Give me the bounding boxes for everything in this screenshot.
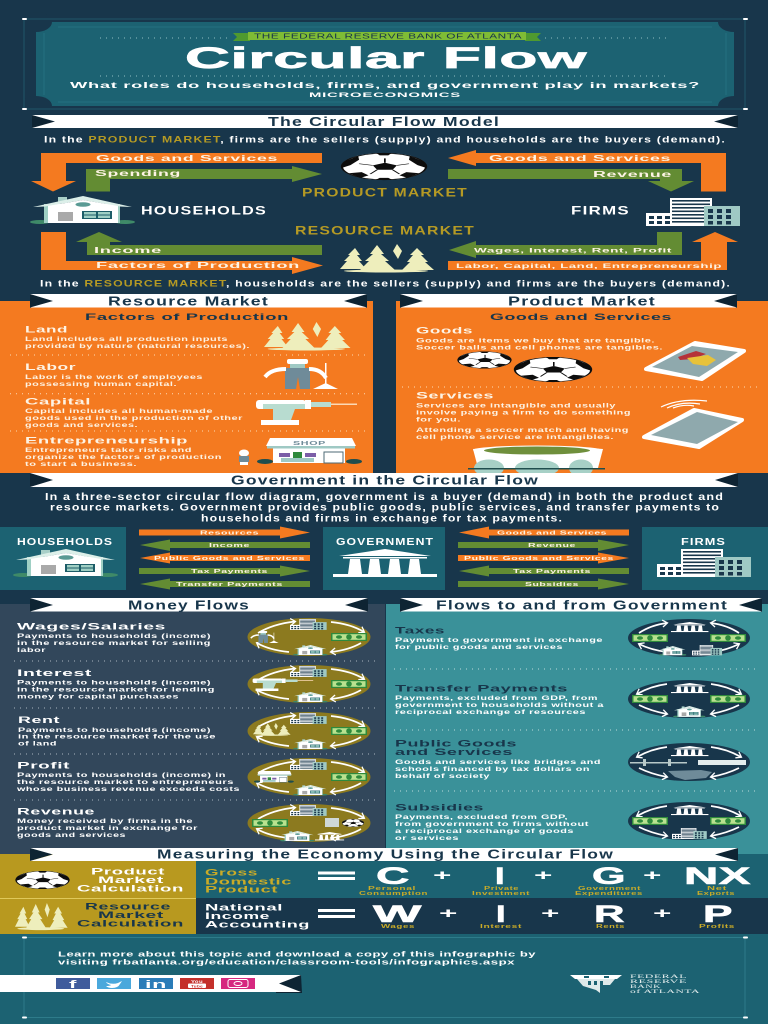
equation: GDP: C	[376, 863, 410, 890]
equation: GDP: Net	[707, 886, 727, 892]
item: revenue	[17, 806, 199, 839]
icon: soccer ball	[341, 153, 427, 180]
icon: firms	[646, 198, 740, 226]
icon: shop	[257, 438, 362, 464]
icon: youtube: You	[191, 979, 203, 984]
item: rent: Payments to households (income)	[18, 728, 211, 734]
equation: GDP	[318, 863, 751, 897]
icon: facebook: f	[69, 979, 77, 991]
item: services: for you.	[416, 418, 461, 424]
item: goods	[416, 326, 663, 352]
item: services	[416, 390, 631, 441]
item: goods: Goods	[416, 326, 473, 336]
heading: measuring the economy	[30, 848, 738, 862]
heading: product market	[400, 294, 737, 308]
heading: resource market: Resource Market	[108, 294, 269, 308]
equation: national income: +	[541, 905, 560, 922]
arrow: goods and services left: Goods and Services	[96, 154, 279, 163]
item: taxes: Taxes	[395, 626, 445, 636]
arrow: income: Income	[94, 246, 163, 255]
arrow: public goods left	[140, 552, 310, 564]
heading: The Circular Flow Model	[32, 114, 738, 129]
item: subsidies: Payments, excluded from GDP,	[395, 815, 568, 821]
equation: national income: +	[653, 905, 672, 922]
item: wages/salaries: in the resource market for selling	[17, 641, 211, 647]
text: product market intro: In the PRODUCT MARKET , firms are the sellers (supply) and households are the buyers (demand).	[44, 134, 726, 146]
arrow: public goods right: Public Goods and Services	[464, 556, 614, 562]
arrow: tax payments to government	[459, 566, 629, 576]
item: profit: the resource market to entrepreneurs	[17, 780, 235, 786]
icon: house	[30, 196, 135, 224]
panel: measuring the economy	[0, 848, 768, 934]
panel: resource market	[0, 294, 373, 473]
item: labor: possessing human capital.	[25, 382, 177, 388]
item: entrepreneurship: organize the factors of production	[25, 455, 222, 461]
arrow: revenue: Revenue	[528, 543, 576, 549]
panel: header	[20, 12, 750, 116]
heading: product market: Product Market	[508, 294, 656, 308]
logo: Federal Reserve Bank of Atlanta: of ATLANTA	[630, 988, 700, 995]
arrow: income: Income	[209, 543, 250, 549]
equation: GDP: +	[643, 867, 662, 884]
banner: Federal Reserve: THE FEDERAL RESERVE BANK OF ATLANTA	[254, 34, 522, 40]
label: national income accounting	[205, 902, 310, 930]
icon: wifi	[661, 400, 707, 408]
equation: GDP: Expenditures	[575, 891, 643, 897]
item: public goods and services	[395, 738, 601, 780]
equation: GDP: +	[534, 867, 553, 884]
arrow: factors of production	[41, 232, 323, 274]
equation: national income: R	[594, 901, 625, 928]
item: transfer payments: Transfer Payments	[395, 684, 568, 694]
equation: national income	[318, 901, 735, 930]
icon: small ball	[458, 352, 512, 368]
icon: youtube	[180, 978, 214, 989]
icon: subsidies flow	[628, 802, 750, 840]
item: public goods and services: Public Goods	[395, 738, 517, 750]
label: product market: PRODUCT MARKET	[302, 188, 468, 200]
icon: wages flow	[248, 618, 370, 656]
item: public goods and services: Goods and services like bridges and	[395, 760, 601, 766]
equation: GDP: NX	[684, 863, 751, 890]
item: public goods and services: and Services	[395, 747, 513, 758]
label: resource market calculation	[77, 902, 184, 928]
icon: large ball	[514, 357, 592, 382]
panel: firms	[642, 527, 768, 590]
item: services: involve paying a firm to do something	[416, 410, 631, 416]
item: services: cell phone service are intangibles.	[416, 435, 614, 441]
ribbon: social media	[0, 975, 302, 993]
equation: national income: Profits	[699, 924, 735, 930]
equation: national income: +	[439, 905, 458, 922]
equation: GDP: G	[592, 863, 626, 890]
item: entrepreneurship	[25, 436, 222, 468]
item: subsidies: a reciprocal exchange of goods	[395, 829, 575, 835]
icon: rent flow	[248, 712, 370, 750]
item: transfer payments: reciprocal exchange of resources	[395, 710, 587, 716]
logo: Federal Reserve Bank of Atlanta: BANK	[630, 984, 661, 990]
icon: youtube: Tube	[191, 984, 204, 988]
item: transfer payments	[395, 684, 605, 716]
item: labor: Labor is the work of employees	[25, 375, 204, 381]
item: interest: Interest	[17, 668, 93, 679]
icon: taxes flow	[628, 619, 750, 657]
equation: GDP: Consumption	[359, 891, 428, 897]
item: entrepreneurship: to start a business.	[25, 462, 137, 468]
arrow: public goods left: Public Goods and Services	[154, 556, 305, 562]
label: resource market calculation: Market	[98, 910, 164, 920]
arrow: subsidies	[458, 578, 629, 590]
text: learn more: Learn more about this topic and download a copy of this infographic by	[58, 950, 537, 958]
arrow: spending: Spending	[95, 169, 181, 178]
arrow: wages: Wages, Interest, Rent, Profit	[474, 248, 673, 254]
arrow: transfer payments: Transfer Payments	[176, 582, 283, 588]
item: revenue: goods and services	[17, 833, 127, 839]
panel: households: HOUSEHOLDS	[17, 536, 113, 548]
item: entrepreneurship: Entrepreneurship	[25, 436, 188, 446]
item: taxes: Payment to government in exchange	[395, 638, 604, 644]
heading: government in the circular flow: Government in the Circular Flow	[231, 472, 539, 488]
heading: money flows	[30, 598, 368, 612]
item: subsidies	[395, 802, 589, 842]
item: transfer payments: Payments, excluded from GDP, from	[395, 696, 598, 702]
text: government intro	[45, 492, 724, 524]
arrow: subsidies: Subsidies	[525, 582, 579, 588]
item: revenue: Revenue	[17, 806, 95, 818]
diagram: circular flow	[30, 150, 740, 274]
label: firms: FIRMS	[571, 206, 630, 218]
label: product market calculation: Product	[91, 866, 165, 876]
item: wages/salaries	[17, 622, 211, 654]
item: subsidies: Subsidies	[395, 802, 484, 814]
item: revenue: product market in exchange for	[17, 826, 199, 832]
text: government intro: households and firms in exchange for tax payments.	[201, 514, 563, 524]
arrow: resources	[139, 526, 310, 538]
label: national income accounting: Income	[205, 911, 270, 921]
item: interest	[17, 668, 215, 701]
panel: government: GOVERNMENT	[336, 536, 434, 548]
icon: transfer flow	[628, 680, 750, 718]
item: taxes	[395, 626, 604, 651]
item: interest: Payments to households (income)	[17, 681, 211, 687]
equation: GDP: Government	[578, 886, 641, 892]
item: capital	[25, 396, 244, 429]
item: profit: Profit	[17, 760, 71, 772]
icon: linkedin: in	[145, 979, 167, 991]
item: entrepreneurship: Entrepreneurs take risks and	[25, 448, 192, 454]
text: government intro: resource markets. Government provides public goods, public services, and transfer payments to	[50, 502, 720, 514]
item: rent: of land	[18, 742, 57, 748]
arrow: labor capital land	[448, 232, 738, 270]
equation: national income: W	[373, 901, 422, 928]
arrow: goods and services	[459, 526, 629, 538]
panel: money flows	[0, 598, 385, 854]
arrow: goods and services left	[31, 153, 322, 192]
item: capital: Capital	[25, 396, 91, 408]
equation: GDP: Personal	[368, 886, 417, 892]
equation: national income: I	[496, 901, 506, 928]
arrow: revenue	[448, 169, 694, 192]
item: profit: whose business revenue exceeds costs	[15, 787, 241, 793]
item: public goods and services: behalf of society	[395, 774, 491, 780]
text: learn more: visiting frbatlanta.org/education/classroom-tools/infographics.aspx	[58, 958, 516, 966]
label: product market calculation: Market	[98, 875, 164, 885]
subheading: factors of production: Factors of Production	[85, 312, 289, 322]
heading: The Circular Flow Model: The Circular Flow Model	[268, 114, 500, 129]
label: resource market calculation: Calculation	[77, 918, 184, 928]
item: capital: Capital includes all human-made	[25, 409, 214, 415]
item: wages/salaries: labor	[17, 648, 47, 654]
label: product market calculation: Calculation	[77, 884, 184, 894]
label: microeconomics: MICROECONOMICS	[309, 93, 461, 99]
equation: GDP: I	[495, 863, 505, 890]
item: land: provided by nature (natural resources).	[25, 344, 250, 350]
item: rent: in the resource market for the use	[18, 735, 217, 741]
logo: Federal Reserve Bank of Atlanta: RESERVE	[630, 979, 688, 985]
arrow: goods and services right: Goods and Services	[489, 154, 672, 163]
text: learn more	[58, 950, 537, 966]
logo: Federal Reserve Bank of Atlanta	[570, 974, 700, 995]
icon: instagram	[221, 978, 255, 989]
label: gross domestic product: Domestic	[205, 876, 292, 886]
equation: GDP: Investment	[472, 891, 530, 897]
panel: flows to and from government	[386, 598, 768, 854]
item: wages/salaries: Wages/Salaries	[17, 622, 166, 632]
icon: interest flow	[248, 665, 370, 703]
equation: GDP: +	[433, 867, 452, 884]
item: rent	[18, 715, 217, 748]
panel: product market	[396, 294, 768, 476]
icon: phone with service	[644, 410, 742, 447]
item: services: Services	[416, 390, 494, 402]
label: product market calculation	[77, 866, 184, 894]
item: wages/salaries: Payments to households (income)	[17, 634, 211, 640]
icon: twitter	[97, 978, 131, 989]
label: national income accounting: National	[205, 902, 283, 912]
item: profit: Payments to households (income) in	[17, 773, 226, 779]
logo: Federal Reserve Bank of Atlanta: FEDERAL	[630, 974, 688, 980]
item: subsidies: from government to firms without	[395, 822, 589, 828]
equation: national income: Interest	[480, 924, 522, 930]
heading: money flows: Money Flows	[128, 598, 250, 612]
diagram: government flows	[0, 526, 768, 590]
arrow: wages	[449, 232, 682, 258]
item: land	[25, 324, 250, 350]
icon: trees	[15, 903, 68, 930]
arrow: revenue: Revenue	[593, 170, 673, 179]
arrow: revenue	[458, 540, 629, 551]
heading: government in the circular flow	[30, 472, 738, 488]
icon: revenue flow	[248, 804, 370, 842]
icon: worker	[265, 359, 338, 389]
label: national income accounting: Accounting	[205, 920, 310, 930]
arrow: tax payments: Tax Payments	[191, 569, 268, 575]
icon: public goods flow	[628, 743, 750, 781]
label: gross domestic product: Product	[205, 884, 278, 894]
label: gross domestic product	[205, 868, 292, 894]
icon: drill	[256, 400, 357, 425]
title: Circular Flow	[185, 42, 588, 75]
equation: GDP: Private	[484, 886, 519, 892]
item: interest: money for capital purchases	[17, 695, 180, 701]
icon: trees	[340, 244, 434, 272]
icon: facebook	[56, 978, 90, 991]
arrow: labor capital land: Labor, Capital, Land, Entrepreneurship	[456, 263, 722, 270]
item: goods: Soccer balls and cell phones are tangibles.	[416, 346, 663, 352]
arrow: goods and services: Goods and Services	[497, 530, 607, 536]
arrow: factors of production: Factors of Production	[96, 261, 300, 270]
label: gross domestic product: Gross	[205, 868, 258, 878]
icon: entrepreneur	[239, 450, 249, 465]
icon: linkedin	[139, 978, 173, 991]
banner: Federal Reserve	[233, 32, 541, 41]
icon: soccer ball	[16, 871, 70, 889]
item: rent: Rent	[18, 715, 61, 726]
item: capital: goods and services.	[25, 423, 138, 429]
equation: GDP: Exports	[697, 891, 735, 897]
panel: households	[0, 527, 126, 590]
heading: flows to and from government: Flows to and from Government	[436, 598, 728, 612]
item: capital: goods used in the production of other	[25, 416, 244, 422]
arrow: public goods right	[458, 552, 629, 564]
item: profit	[15, 760, 241, 793]
equation: national income: P	[703, 901, 733, 928]
panel: government	[323, 527, 445, 590]
arrow: resources: Resources	[200, 530, 259, 536]
item: interest: in the resource market for lending	[17, 688, 215, 694]
item: land: Land includes all production inputs	[25, 337, 229, 343]
item: labor	[25, 362, 204, 388]
icon: profit flow	[248, 758, 370, 796]
icon: trees	[264, 322, 350, 350]
arrow: tax payments	[139, 566, 310, 576]
subtitle: What roles do households, firms, and government play in markets?	[70, 81, 700, 90]
label: resource market calculation: Resource	[85, 902, 171, 912]
item: transfer payments: government to households without a	[395, 703, 605, 709]
arrow: transfer payments	[140, 578, 310, 590]
heading: resource market	[30, 294, 367, 308]
arrow: income	[76, 232, 322, 255]
item: public goods and services: schools financed by tax dollars on	[395, 767, 590, 773]
item: services: Attending a soccer match and having	[416, 428, 629, 434]
icon: stadium	[468, 446, 605, 476]
panel: firms: FIRMS	[681, 536, 726, 548]
icon: phone	[646, 343, 744, 379]
item: services: Services are intangible and usually	[416, 404, 617, 410]
text: government intro: In a three-sector circular flow diagram, government is a buyer (demand) in both the product and	[45, 492, 724, 503]
arrow: income	[140, 540, 310, 551]
equation: national income: Rents	[596, 924, 625, 930]
item: revenue: Money received by firms in the	[17, 819, 194, 825]
arrow: tax payments to government: Tax Payments	[513, 569, 591, 575]
item: goods: Goods are items we buy that are tangible.	[416, 338, 655, 344]
equation: national income: Wages	[381, 924, 415, 930]
item: labor: Labor	[25, 362, 76, 373]
arrow: goods and services right	[448, 150, 726, 192]
subheading: goods and services: Goods and Services	[490, 312, 672, 322]
heading: measuring the economy: Measuring the Economy Using the Circular Flow	[157, 848, 614, 862]
item: subsidies: or services	[395, 836, 460, 842]
item: land: Land	[25, 324, 68, 336]
item: taxes: for public goods and services	[395, 645, 564, 651]
panel: footer	[0, 934, 768, 1024]
label: resource market: RESOURCE MARKET	[295, 226, 475, 238]
heading: flows to and from government	[400, 598, 762, 612]
label: households: HOUSEHOLDS	[141, 206, 267, 218]
icon: shop: SHOP	[293, 441, 327, 447]
arrow: spending	[86, 166, 322, 192]
text: resource market intro: In the RESOURCE MARKET , households are the sellers (supply) and firms are the buyers (demand).	[40, 278, 731, 290]
